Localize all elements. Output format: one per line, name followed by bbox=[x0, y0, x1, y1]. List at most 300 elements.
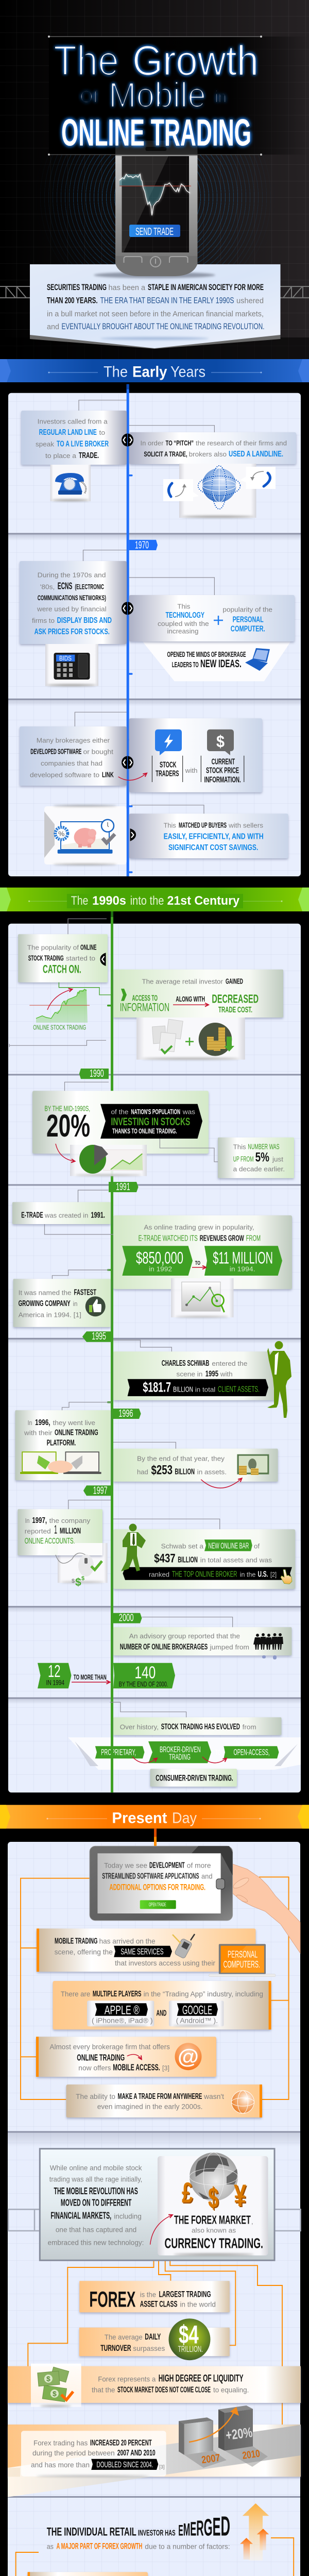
connectors: growth factors bbox=[16, 2538, 294, 2576]
text box: number was up from 5 percent: a decade earlier. bbox=[233, 1165, 285, 1173]
forex market tile bbox=[150, 2153, 268, 2256]
heading: individual retail investor: A MAJOR PART OF FOREX GROWTH bbox=[57, 2541, 142, 2551]
intro text: SECURITIES TRADING bbox=[47, 282, 107, 292]
text box: stock traders with current price: INFORMATION. bbox=[204, 775, 241, 784]
text box: 253 billion in assets: $253 bbox=[151, 1463, 173, 1478]
icon: handshake laptops bbox=[20, 1452, 101, 1474]
text box: number of online brokerages: An advisory group reported that the bbox=[129, 1632, 240, 1640]
section title bbox=[71, 894, 240, 908]
text box: number was up from 5 percent: This bbox=[233, 1143, 246, 1151]
heading: individual retail investor: as bbox=[47, 2542, 54, 2550]
text box: charles schwab: BILLION bbox=[173, 1385, 193, 1394]
google tile: GOOGLE bbox=[182, 2003, 212, 2017]
icon: bids keypad bbox=[45, 644, 98, 686]
open trade button bbox=[140, 1900, 176, 1909]
year tag: 2000: 2000 bbox=[119, 1613, 134, 1624]
text box: stock traders with current price: CURRENT bbox=[212, 757, 235, 766]
revenue flag: 1994: in 1994. bbox=[230, 1265, 255, 1273]
section banner: 1990s into the 21st century bbox=[0, 888, 309, 911]
text box: matched up buyers: SIGNIFICANT COST SAVINGS. bbox=[168, 843, 258, 852]
text box: mobile trading: SAME SERVICES bbox=[121, 1946, 164, 1956]
icon: piggy bank laptop bbox=[44, 805, 127, 866]
text box: forex largest asset class: LARGEST TRADING bbox=[159, 2289, 211, 2299]
text box: multiple players: in the “Trading App” industry, including bbox=[144, 1990, 263, 1998]
text box: technology plus personal computer: PERSONAL bbox=[233, 616, 264, 624]
text box: e-trade revenues bbox=[113, 1215, 292, 1289]
revenue flag: 1992: in 1992 bbox=[149, 1265, 172, 1273]
text box: ECNs: DISPLAY BIDS AND bbox=[57, 616, 112, 625]
apple tile: APPLE ® bbox=[105, 2003, 140, 2017]
text box: 20 percent investing in stocks: of the bbox=[111, 1108, 129, 1115]
year tag: 1997 bbox=[83, 1485, 111, 1496]
panel: the early years timeline bbox=[8, 384, 301, 876]
text band: liquidity bbox=[8, 2364, 301, 2407]
text box: number was up from 5 percent: UP FROM bbox=[233, 1156, 253, 1164]
text box: schwab new online bar: ranked bbox=[149, 1571, 169, 1579]
icon: rotary telephone bbox=[50, 465, 91, 501]
text box: ECNs: '80s, bbox=[40, 583, 55, 590]
text box: schwab new online bar: $437 bbox=[154, 1552, 176, 1566]
text band: liquidity: HIGH DEGREE OF LIQUIDITY bbox=[159, 2374, 244, 2384]
text box: e-trade revenues: E-TRADE WATCHED ITS bbox=[139, 1234, 198, 1243]
phone callout left bbox=[163, 479, 199, 501]
year tag: 1970: 1970 bbox=[135, 539, 149, 551]
title: Growth bbox=[132, 38, 259, 84]
text box: mobile trading: that investors access using their bbox=[115, 1959, 215, 1967]
flow: proprietary to consumer driven: PROPRIETARY, bbox=[101, 1748, 136, 1757]
intro text: ushered bbox=[236, 297, 264, 306]
text box: schwab new online bar: U.S. bbox=[258, 1570, 268, 1579]
text box: forex largest asset class: is the bbox=[140, 2290, 156, 2298]
icon: orange globe bbox=[232, 2091, 254, 2113]
text box: online trading platform: PLATFORM. bbox=[47, 1439, 76, 1448]
text box: online trading platform: they went live bbox=[53, 1419, 95, 1427]
icon: hand cursor bbox=[281, 1569, 292, 1584]
intro text bbox=[47, 282, 265, 331]
forex intro text: MOVED ON TO DIFFERENT bbox=[61, 2198, 131, 2208]
section title: The bbox=[104, 364, 128, 381]
text box: mobile access: Almost every brokerage firm that offers bbox=[49, 2042, 170, 2050]
text box: 20 percent investing in stocks bbox=[32, 1091, 209, 1154]
revenue flag: 1994 bbox=[204, 1246, 282, 1276]
title frame lines bbox=[48, 36, 262, 156]
text box: mobile access: now offers bbox=[78, 2063, 111, 2072]
text box: access to information: DECREASED bbox=[212, 992, 259, 1006]
text box: multiple players bbox=[53, 1981, 271, 2029]
text box: e-trade revenues: As online trading grew in popularity, bbox=[144, 1224, 254, 1231]
text box: brokerages software: developed software to bbox=[30, 771, 99, 778]
forex intro text: THE MOBILE REVOLUTION HAS bbox=[54, 2186, 138, 2196]
text tile: Forex trading has bbox=[33, 2439, 88, 2447]
text box: stock trading evolved: from bbox=[243, 1723, 256, 1731]
text tile: during the period between bbox=[32, 2449, 115, 2457]
text box: 253 billion in assets: in assets. bbox=[197, 1468, 227, 1476]
icon: globe with currency symbols bbox=[182, 2153, 246, 2214]
intro text: has been a bbox=[108, 284, 146, 292]
text box: number was up from 5 percent: 5% bbox=[255, 1150, 269, 1165]
arrow: red curve bbox=[118, 773, 147, 780]
text box: trade from anywhere: wasn't bbox=[203, 2092, 224, 2100]
year tag: 1990 bbox=[79, 1068, 109, 1079]
text box: schwab new online bar bbox=[113, 1524, 295, 1589]
timeline marker bbox=[122, 434, 133, 446]
text box: brokerages software: LINK bbox=[102, 771, 114, 779]
text box: 1 million online accounts: $ bbox=[75, 1577, 81, 1588]
text tile: [3] bbox=[159, 2465, 165, 2470]
text box: technology plus personal computer: popularity of the bbox=[222, 605, 272, 613]
text box: access to information bbox=[113, 970, 283, 1018]
text box: online trading platform: In bbox=[28, 1419, 32, 1427]
laptop: personal computers: PERSONAL bbox=[228, 1949, 258, 1959]
icon: mouse with dollars bbox=[58, 1543, 108, 1583]
icon: cash with check: $ bbox=[46, 2375, 50, 2383]
text box: daily turnover: The average bbox=[105, 2333, 143, 2341]
text box: catch on: started to bbox=[66, 954, 95, 962]
text box: mobile access: [3] bbox=[162, 2064, 169, 2072]
stat flag: 12 in 1994: IN 1994 bbox=[46, 1679, 64, 1687]
illustration: hand holding tablet bbox=[232, 1864, 300, 1953]
text box: charles schwab: in total bbox=[195, 1386, 215, 1394]
figure: businessman silhouette bbox=[267, 1341, 291, 1418]
icon: cash with check bbox=[31, 2364, 81, 2407]
section title bbox=[104, 364, 205, 381]
icon: blue laptop bbox=[245, 648, 270, 671]
text box: schwab new online bar: Schwab set a bbox=[161, 1543, 204, 1550]
icon: pie chart and growth chart bbox=[56, 1144, 147, 1176]
text box: charles schwab: 1995 bbox=[205, 1370, 218, 1379]
laptop: personal computers: COMPUTERS. bbox=[224, 1959, 260, 1970]
forex intro text: trading was all the rage initially, bbox=[49, 2175, 142, 2183]
text box: schwab new online bar: BILLION bbox=[178, 1556, 198, 1565]
text box: schwab new online bar: NEW ONLINE BAR bbox=[208, 1542, 249, 1551]
text tile: DOUBLED SINCE 2004. bbox=[97, 2461, 153, 2469]
bar chart: 2007 vs 2010: 2007 bbox=[201, 2452, 221, 2466]
text box: forex largest asset class: ASSET CLASS bbox=[140, 2299, 177, 2309]
send trade button bbox=[129, 225, 180, 238]
text box: mobile access: MOBILE ACCESS. bbox=[113, 2062, 160, 2072]
phone callout right bbox=[240, 467, 276, 489]
text box: daily turnover: DAILY bbox=[145, 2332, 161, 2342]
text box: access to information: INFORMATION bbox=[120, 1001, 169, 1014]
text box: 20 percent investing in stocks: was bbox=[182, 1108, 196, 1115]
text box: ECNs: COMMUNICATIONS NETWORKS) bbox=[38, 594, 106, 602]
intro text: THAN 200 YEARS. bbox=[47, 296, 98, 306]
intro text: and bbox=[47, 323, 59, 331]
stat flag: 12 in 1994 bbox=[38, 1662, 71, 1688]
text box: pitch research: the research of their firms and bbox=[196, 439, 287, 447]
text box: charles schwab: $181.7 bbox=[143, 1380, 171, 1395]
text box: regular land line: to bbox=[99, 429, 105, 436]
icon: globe with currency symbols: ¥ bbox=[234, 2178, 246, 2213]
icon: business people silhouettes bbox=[253, 1633, 283, 1650]
icon: dollar bill and coins bbox=[237, 1454, 269, 1475]
text box: technology plus personal computer: NEW IDEAS. bbox=[200, 658, 242, 670]
text box: pitch research bbox=[129, 432, 296, 464]
tablet text: and bbox=[201, 1872, 212, 1880]
text box: regular land line: to place a bbox=[45, 452, 77, 460]
send trade button: SEND TRADE bbox=[135, 226, 174, 238]
year tag: 1996: 1996 bbox=[118, 1408, 133, 1419]
text box: catch on: ONLINE bbox=[80, 943, 97, 952]
text box: fastest growing company: It was named the bbox=[19, 1289, 71, 1296]
timeline marker bbox=[122, 756, 133, 769]
text box: matched up buyers: with sellers bbox=[228, 822, 264, 829]
text box: pitch research: USED A LANDLINE. bbox=[229, 450, 283, 459]
text box: stock traders with current price bbox=[129, 718, 262, 792]
section title: The bbox=[71, 894, 88, 908]
title: Mobile bbox=[109, 75, 206, 115]
year tag: 1990: 1990 bbox=[90, 1068, 104, 1079]
text box: catch on: The popularity of bbox=[27, 943, 79, 951]
text box: number was up from 5 percent bbox=[218, 1138, 294, 1178]
heading: individual retail investor: EMERGED bbox=[178, 2511, 230, 2542]
text box: mobile trading bbox=[37, 1928, 276, 1977]
text box: schwab new online bar: THE TOP ONLINE BROKER bbox=[172, 1570, 237, 1579]
forex intro text: embraced this new technology: bbox=[48, 2239, 144, 2247]
text box: 20 percent investing in stocks: BY THE MID-1990S, bbox=[44, 1105, 90, 1113]
google tile bbox=[169, 2001, 224, 2027]
text box: 1 million online accounts: 1997, bbox=[32, 1516, 47, 1525]
text box: access to information: ACCESS TO bbox=[132, 994, 158, 1003]
text box: fastest growing company: FASTEST bbox=[74, 1288, 96, 1297]
text box: 1 million online accounts: ONLINE ACCOUNTS. bbox=[25, 1537, 75, 1546]
forex intro text: FINANCIAL MARKETS, bbox=[50, 2211, 111, 2221]
text box: regular land line: Investors called from a bbox=[38, 418, 108, 426]
chart: online stock trading bbox=[29, 989, 90, 1031]
connectors: present day bbox=[21, 1877, 289, 2425]
hero section bbox=[0, 0, 309, 359]
section title: Present bbox=[112, 1809, 167, 1826]
text box: leverage bbox=[25, 2572, 148, 2576]
flow: proprietary to consumer driven bbox=[95, 1737, 279, 1792]
text box: stock trading evolved: STOCK TRADING HAS EVOLVED bbox=[161, 1723, 240, 1732]
text box: fastest growing company: in bbox=[73, 1300, 77, 1308]
section title bbox=[112, 1809, 197, 1826]
text box: schwab new online bar: in total assets and was bbox=[200, 1556, 272, 1564]
icon: lightning bubble bbox=[155, 730, 182, 755]
text box: 20 percent investing in stocks: 20% bbox=[46, 1108, 90, 1143]
section title: 1990s bbox=[92, 894, 126, 908]
title: in bbox=[215, 87, 227, 106]
icon: mobile phone and stylus bbox=[173, 1934, 195, 1959]
text box: stock traders with current price: STOCK bbox=[160, 760, 177, 769]
stat circle: 4 trillion bbox=[169, 2318, 210, 2360]
year tag: 1995 bbox=[82, 1331, 113, 1342]
stat circle: 4 trillion: $4 bbox=[179, 2320, 199, 2349]
text box: 1 million online accounts bbox=[18, 1509, 102, 1588]
stat circle: 4 trillion: TRILLION. bbox=[178, 2344, 203, 2354]
year tag: 1991: 1991 bbox=[116, 1181, 130, 1193]
section title: Early bbox=[132, 364, 167, 381]
text box: trade from anywhere: even imagined in the early 2000s. bbox=[97, 2102, 202, 2110]
heading: individual retail investor: due to a number of factors: bbox=[145, 2542, 230, 2550]
text band: liquidity: STOCK MARKET DOES NOT COME CLOSE bbox=[117, 2385, 211, 2394]
flow: proprietary to consumer driven: TRADING bbox=[169, 1753, 191, 1762]
bar chart: 2007 vs 2010: 2010 bbox=[242, 2448, 261, 2462]
section title: Day bbox=[172, 1809, 197, 1826]
text box: stock traders with current price: TRADERS bbox=[156, 770, 179, 778]
chart: online stock trading: ONLINE STOCK TRADING bbox=[33, 1023, 86, 1031]
forex intro text: one that has captured and bbox=[56, 2226, 136, 2234]
panel: 1990s timeline bbox=[8, 911, 301, 1792]
text box: mobile trading: has arrived on the bbox=[99, 1937, 156, 1945]
text tile: 2007 AND 2010 bbox=[117, 2449, 156, 2458]
text box: e-trade revenues: REVENUES GROW bbox=[200, 1234, 244, 1243]
text box: ECNs: (ELECTRONIC bbox=[75, 582, 104, 590]
text: to more than bbox=[72, 1673, 110, 1682]
tablet bbox=[90, 1846, 233, 1921]
text box: mobile trading: scene, offering the bbox=[55, 1947, 113, 1956]
icon: piggy bank laptop: % bbox=[58, 829, 65, 838]
year tag: 1997: 1997 bbox=[93, 1485, 108, 1496]
text band: liquidity: Forex represents a bbox=[98, 2375, 156, 2383]
tablet text: of more bbox=[187, 1861, 211, 1870]
text box: 253 billion in assets: had bbox=[137, 1468, 148, 1476]
text box: e-trade created: E-TRADE bbox=[21, 1211, 43, 1219]
text box: technology plus personal computer: OPENED THE MINDS OF BROKERAGE bbox=[167, 651, 246, 659]
text box: matched up buyers: This bbox=[164, 822, 176, 829]
icon: at sign: @ bbox=[178, 2045, 199, 2068]
icon: cash with check: $ bbox=[53, 2389, 57, 2398]
text band: liquidity: to equaling. bbox=[213, 2385, 249, 2394]
stat flag: 12 in 1994: 12 bbox=[48, 1662, 61, 1681]
text box: brokerages software: Many brokerages either bbox=[37, 737, 110, 744]
heading: individual retail investor bbox=[47, 2511, 230, 2551]
intro panel bbox=[30, 256, 280, 349]
text: to more than: TO MORE THAN bbox=[74, 1673, 107, 1681]
text box: multiple players: There are bbox=[61, 1990, 90, 1998]
text box: access to information: ALONG WITH bbox=[176, 995, 205, 1004]
heading: individual retail investor: INVESTOR HAS bbox=[138, 2529, 176, 2538]
text box: stock trading evolved bbox=[68, 1717, 301, 1770]
title bbox=[54, 38, 259, 154]
text box: matched up buyers: EASILY, EFFICIENTLY, AND WITH bbox=[164, 832, 264, 841]
text tile bbox=[21, 2431, 166, 2477]
text band: liquidity: that the bbox=[92, 2385, 115, 2394]
text box: e-trade revenues: FROM bbox=[246, 1234, 261, 1243]
icon: magnified chart bbox=[171, 1278, 234, 1318]
forex market tile: THE FOREX MARKET bbox=[174, 2213, 251, 2227]
text box: technology plus personal computer bbox=[129, 595, 295, 681]
section banner: the early years bbox=[0, 359, 309, 382]
text box: online trading platform: with their bbox=[24, 1429, 53, 1437]
timeline bbox=[127, 384, 133, 876]
text box: number of online brokerages: NUMBER OF ONLINE BROKERAGES bbox=[120, 1643, 208, 1652]
text box: multiple players: MULTIPLE PLAYERS bbox=[93, 1990, 142, 1998]
text box: 20 percent investing in stocks: THANKS TO ONLINE TRADING. bbox=[112, 1127, 177, 1135]
text box: number of online brokerages bbox=[113, 1627, 291, 1659]
text box: pitch research: In order bbox=[140, 439, 164, 447]
text box: trade from anywhere: MAKE A TRADE FROM ANYWHERE bbox=[117, 2092, 202, 2101]
tablet text: ADDITIONAL OPTIONS FOR TRADING. bbox=[109, 1882, 205, 1892]
text box: matched up buyers: MATCHED UP BUYERS bbox=[179, 822, 227, 830]
flow: proprietary to consumer driven: OPEN-ACCESS, bbox=[234, 1748, 270, 1757]
text box: technology plus personal computer: This bbox=[177, 603, 191, 611]
stat flag: 140 by end of 2000: BY THE END OF 2000. bbox=[119, 1680, 168, 1688]
forex intro text: including bbox=[114, 2212, 142, 2221]
flow: proprietary to consumer driven: TO bbox=[215, 1748, 221, 1756]
icon: documents plus coins bbox=[136, 1018, 245, 1060]
tablet text bbox=[102, 1861, 212, 1892]
text box: number was up from 5 percent: NUMBER WAS bbox=[248, 1143, 280, 1151]
text box: 253 billion in assets: By the end of that year, they bbox=[137, 1455, 225, 1463]
text box: mobile access bbox=[36, 2037, 216, 2077]
text box: technology plus personal computer: TECHNOLOGY bbox=[166, 611, 204, 620]
text box: 20 percent investing in stocks: INVESTING IN STOCKS bbox=[111, 1115, 190, 1128]
icon: globe with currency symbols: £ bbox=[182, 2176, 193, 2209]
text box: ECNs bbox=[20, 561, 127, 644]
text box: access to information: TRADE COST. bbox=[218, 1006, 252, 1014]
text box: 253 billion in assets: BILLION bbox=[175, 1468, 195, 1477]
icon: globe with phones bbox=[163, 464, 276, 518]
panel: forex market intro bbox=[40, 2149, 274, 2260]
text box: 1 million online accounts: In bbox=[25, 1517, 29, 1524]
apple tile: ( iPhone®, iPad® ) bbox=[92, 2016, 153, 2025]
text box: technology plus personal computer: COMPUTER. bbox=[231, 625, 265, 634]
text box: daily turnover: TURNOVER bbox=[100, 2343, 131, 2353]
text box: mobile access: ONLINE TRADING bbox=[77, 2052, 125, 2062]
text box: fastest growing company: America in 1994. [1] bbox=[19, 1311, 81, 1319]
stat flag: 140 by end of 2000: 140 bbox=[134, 1663, 156, 1682]
text box: online trading platform bbox=[15, 1410, 111, 1480]
text box: pitch research: SOLICIT A TRADE, bbox=[144, 450, 187, 458]
icon: thumbs up bbox=[85, 1296, 106, 1316]
text box: 1 million online accounts: $ bbox=[72, 1578, 75, 1584]
text box: forex largest asset class: in the world bbox=[180, 2300, 216, 2309]
text box: forex largest asset class bbox=[79, 2281, 230, 2312]
year tag: 1995: 1995 bbox=[92, 1331, 106, 1342]
text box: pitch research: brokers also bbox=[189, 450, 227, 458]
text box: technology plus personal computer: LEADERS TO bbox=[172, 661, 199, 669]
text box: trade from anywhere: The ability to bbox=[76, 2092, 115, 2100]
text box: ECNs: ECNS bbox=[58, 581, 72, 591]
text box: fastest growing company bbox=[13, 1279, 111, 1327]
figure: businessman front bbox=[121, 1524, 146, 1571]
text box: charles schwab bbox=[113, 1351, 276, 1400]
icon: dollar bubble bbox=[207, 730, 234, 755]
text tile: and has more than bbox=[31, 2461, 90, 2469]
text box: brokerages software: DEVELOPED SOFTWARE bbox=[30, 748, 82, 756]
forex intro text bbox=[48, 2164, 144, 2247]
intro text: THE ERA THAT BEGAN IN THE EARLY 1990S bbox=[100, 296, 234, 306]
flow: proprietary to consumer driven: BROKER-DRIVEN bbox=[160, 1745, 201, 1754]
apple tile bbox=[87, 2001, 154, 2027]
stat flag: 140 by end of 2000 bbox=[113, 1663, 175, 1688]
text box: regular land line: TO A LIVE BROKER bbox=[57, 440, 109, 449]
text band: increased 20 percent with bars bbox=[8, 2405, 301, 2497]
icon: rising arrows bbox=[240, 2503, 269, 2561]
text box: technology plus personal computer: increasing bbox=[167, 627, 198, 635]
flow: proprietary to consumer driven: CONSUMER-DRIVEN TRADING. bbox=[156, 1773, 233, 1783]
icon: globe with currency symbols: $ bbox=[208, 2181, 218, 2214]
text box: catch on bbox=[18, 934, 108, 982]
text box: 1 million online accounts: the company bbox=[49, 1517, 91, 1524]
text tile: INCREASED 20 PERCENT bbox=[90, 2439, 152, 2448]
text box: multiple players: AND bbox=[157, 2009, 166, 2018]
icon: dollar bubble: $ bbox=[216, 732, 225, 751]
phone illustration bbox=[115, 141, 198, 276]
forex market tile: , bbox=[251, 2218, 253, 2226]
intro text: in a bull market not seen before in the American financial markets, bbox=[47, 310, 264, 318]
text box: charles schwab: scene in bbox=[176, 1370, 202, 1378]
text box: regular land line: TRADE. bbox=[79, 451, 99, 460]
tablet text: DEVELOPMENT bbox=[149, 1861, 185, 1870]
tablet text: Today we see bbox=[104, 1861, 147, 1870]
revenue flag: 1992: $850,000 bbox=[136, 1249, 183, 1267]
text box: schwab new online bar: [2] bbox=[270, 1571, 277, 1579]
google tile: ( Android™ ). bbox=[176, 2016, 218, 2025]
section title: Years bbox=[170, 364, 205, 381]
